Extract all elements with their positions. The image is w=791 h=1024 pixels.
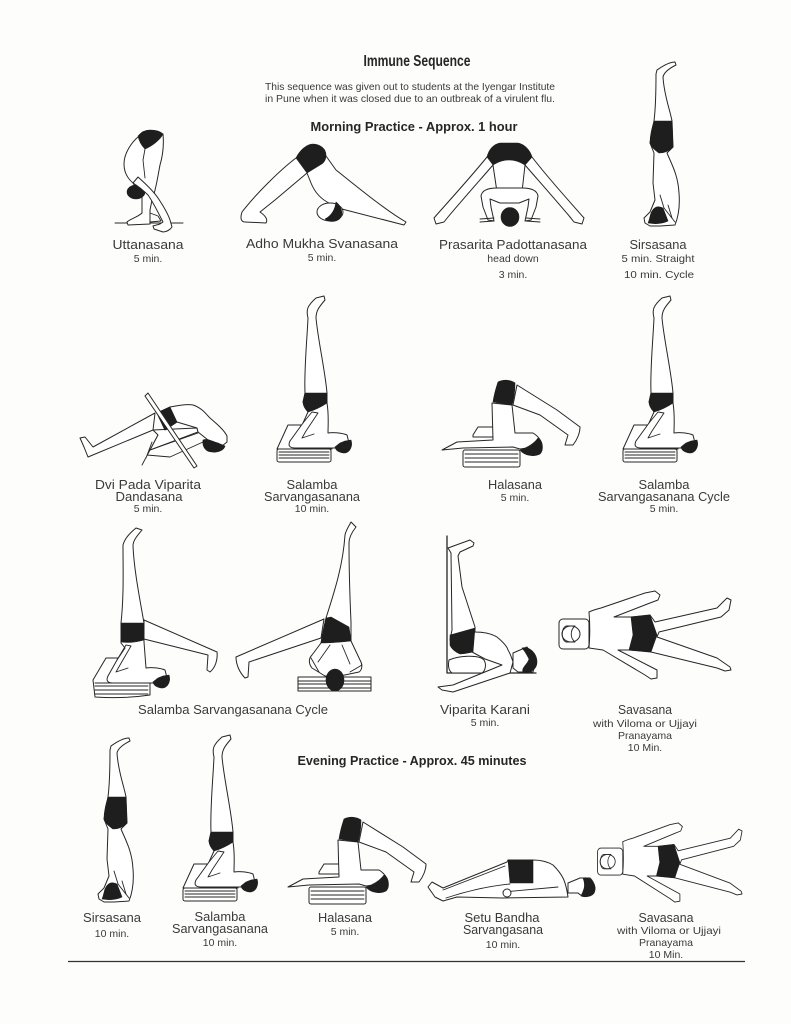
- caption: Viparita Karani: [440, 702, 530, 729]
- caption: Uttanasana: 5 min.: [134, 253, 162, 265]
- caption: Sirsasana, evening: Sirsasana: [83, 910, 142, 925]
- figure: Viparita Karani: [438, 536, 537, 692]
- figure: Setu Bandha Sarvangasana: [428, 860, 595, 901]
- caption: Halasana: 5 min.: [501, 492, 529, 504]
- caption: Salamba Sarvangasanana: 10 min.: [295, 503, 329, 515]
- caption: Setu Bandha Sarvangasana: Sarvangasana: [463, 922, 544, 937]
- figure: shoulderstand cycle, leg lowered right: [93, 528, 217, 698]
- caption: Dvi Pada Viparita Dandasana: Dandasana: [116, 489, 183, 504]
- caption: Adho Mukha Svanasana: Adho Mukha Svanasana: [246, 236, 399, 251]
- caption: Sirsasana: [622, 237, 695, 281]
- caption: Prasarita Padottanasana: head down: [487, 253, 539, 265]
- figure: Dvi Pada Viparita Dandasana: [80, 393, 227, 468]
- title: Immune Sequence: [364, 53, 471, 70]
- caption: Salamba Sarvangasanana: Salamba: [286, 477, 338, 492]
- caption: Salamba Sarvangasanana, evening: 10 min.: [203, 937, 237, 949]
- figure: Sirsasana: [644, 62, 679, 226]
- caption: Halasana, evening: [318, 910, 373, 938]
- caption: Savasana: with Viloma or Ujjayi: [592, 718, 697, 730]
- figure: Halasana: [442, 380, 580, 467]
- caption: Sirsasana: 5 min. Straight: [622, 253, 695, 265]
- figure: Prasarita Padottanasana: [434, 143, 584, 226]
- caption: Prasarita Padottanasana: 3 min.: [499, 269, 527, 281]
- figure: Savasana: [559, 591, 731, 679]
- caption: Sirsasana, evening: 10 min.: [95, 928, 129, 940]
- caption: Dvi Pada Viparita Dandasana: Dvi Pada Viparita: [95, 477, 202, 492]
- caption: Sirsasana: 10 min. Cycle: [624, 269, 694, 281]
- intro text: in Pune when it was closed due to an outbreak of a virulent flu.: [265, 93, 555, 105]
- figure: Uttanasana: [115, 130, 183, 232]
- intro text: [265, 81, 555, 105]
- caption: Viparita Karani: 5 min.: [471, 717, 499, 729]
- caption: Savasana: 10 Min.: [628, 742, 662, 754]
- figure: Salamba Sarvangasanana, evening: [183, 735, 258, 901]
- caption: Salamba Sarvangasanana, evening: Salamba: [194, 909, 246, 924]
- caption: Salamba Sarvangasanana Cycle: Salamba: [638, 477, 690, 492]
- caption: Salamba Sarvangasanana Cycle, row three: Salamba Sarvangasanana Cycle: [138, 702, 328, 717]
- figure: Adho Mukha Svanasana: [241, 144, 406, 225]
- caption: Salamba Sarvangasanana, evening: Sarvangasanana: [172, 921, 269, 936]
- caption: Savasana, evening: 10 Min.: [649, 949, 683, 961]
- caption: Setu Bandha Sarvangasana: Setu Bandha: [464, 910, 540, 925]
- caption: Dvi Pada Viparita Dandasana: 5 min.: [134, 503, 162, 515]
- intro text: This sequence was given out to students at the Iyengar Institute: [265, 81, 555, 93]
- caption: Adho Mukha Svanasana: [246, 236, 399, 264]
- figure: Halasana, evening: [288, 817, 426, 904]
- caption: Prasarita Padottanasana: [439, 237, 588, 281]
- caption: Uttanasana: Uttanasana: [112, 237, 184, 252]
- figure: shoulderstand cycle, leg lowered left: [236, 522, 371, 691]
- caption: Halasana, evening: 5 min.: [331, 926, 359, 938]
- caption: Setu Bandha Sarvangasana: 10 min.: [486, 939, 520, 951]
- caption: Halasana: [488, 477, 543, 504]
- heading: evening practice: Evening Practice - Approx. 45 minutes: [298, 754, 527, 768]
- caption: Adho Mukha Svanasana: 5 min.: [308, 252, 336, 264]
- caption: Dvi Pada Viparita Dandasana: [95, 477, 202, 515]
- figure: Salamba Sarvangasanana: [277, 296, 352, 462]
- caption: Savasana: Pranayama: [618, 730, 672, 742]
- caption: Viparita Karani: Viparita Karani: [440, 702, 530, 717]
- caption: Salamba Sarvangasanana Cycle: 5 min.: [650, 503, 678, 515]
- figure: Sirsasana, evening: [98, 738, 133, 902]
- caption: Salamba Sarvangasanana, evening: [172, 909, 269, 949]
- caption: Sirsasana: Sirsasana: [630, 237, 687, 252]
- caption: Salamba Sarvangasanana: Sarvangasanana: [264, 489, 361, 504]
- caption: Savasana: Savasana: [618, 702, 673, 717]
- caption: Prasarita Padottanasana: Prasarita Padottanasana: [439, 237, 588, 252]
- figure: Savasana, evening: [598, 823, 742, 902]
- caption: Savasana, evening: Savasana: [638, 910, 694, 925]
- caption: Savasana, evening: [616, 910, 721, 961]
- caption: Uttanasana: [112, 237, 184, 265]
- caption: Savasana, evening: with Viloma or Ujjayi: [616, 925, 721, 937]
- caption: Salamba Sarvangasanana Cycle: [598, 477, 730, 515]
- caption: Sirsasana, evening: [83, 910, 142, 940]
- figure: Salamba Sarvangasanana Cycle: [623, 296, 698, 462]
- heading: morning practice: Morning Practice - Approx. 1 hour: [310, 120, 518, 134]
- caption: Halasana, evening: Halasana: [318, 910, 373, 925]
- caption: Salamba Sarvangasanana: [264, 477, 361, 515]
- caption: Halasana: Halasana: [488, 477, 543, 492]
- caption: Savasana, evening: Pranayama: [639, 937, 693, 949]
- caption: Salamba Sarvangasanana Cycle: Sarvangasanana Cycle: [598, 489, 730, 504]
- caption: Setu Bandha Sarvangasana: [463, 910, 544, 951]
- caption: Savasana: [592, 702, 697, 754]
